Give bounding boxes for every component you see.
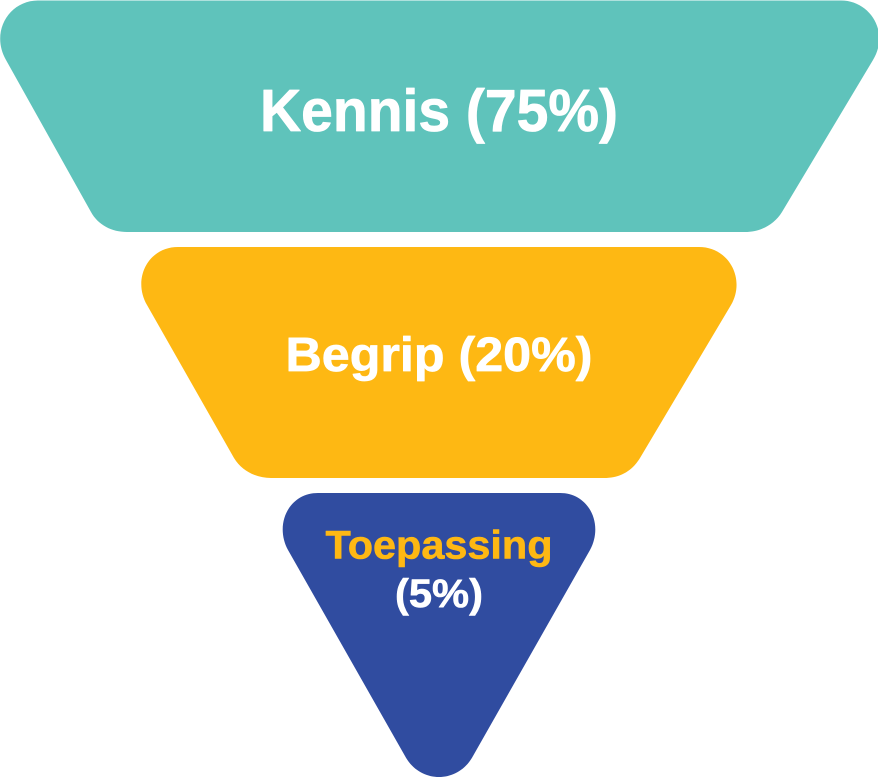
panel: Kennis tier (0, 0, 878, 232)
heading: Kennis: Kennis (75%) (260, 78, 618, 144)
heading: Toepassing: Toepassing (326, 524, 552, 568)
panel: Begrip tier (141, 247, 737, 478)
label: 5 percent: (5%) (395, 572, 483, 616)
panel: Toepassing tier (283, 493, 595, 777)
heading: Begrip: Begrip (20%) (286, 329, 592, 382)
